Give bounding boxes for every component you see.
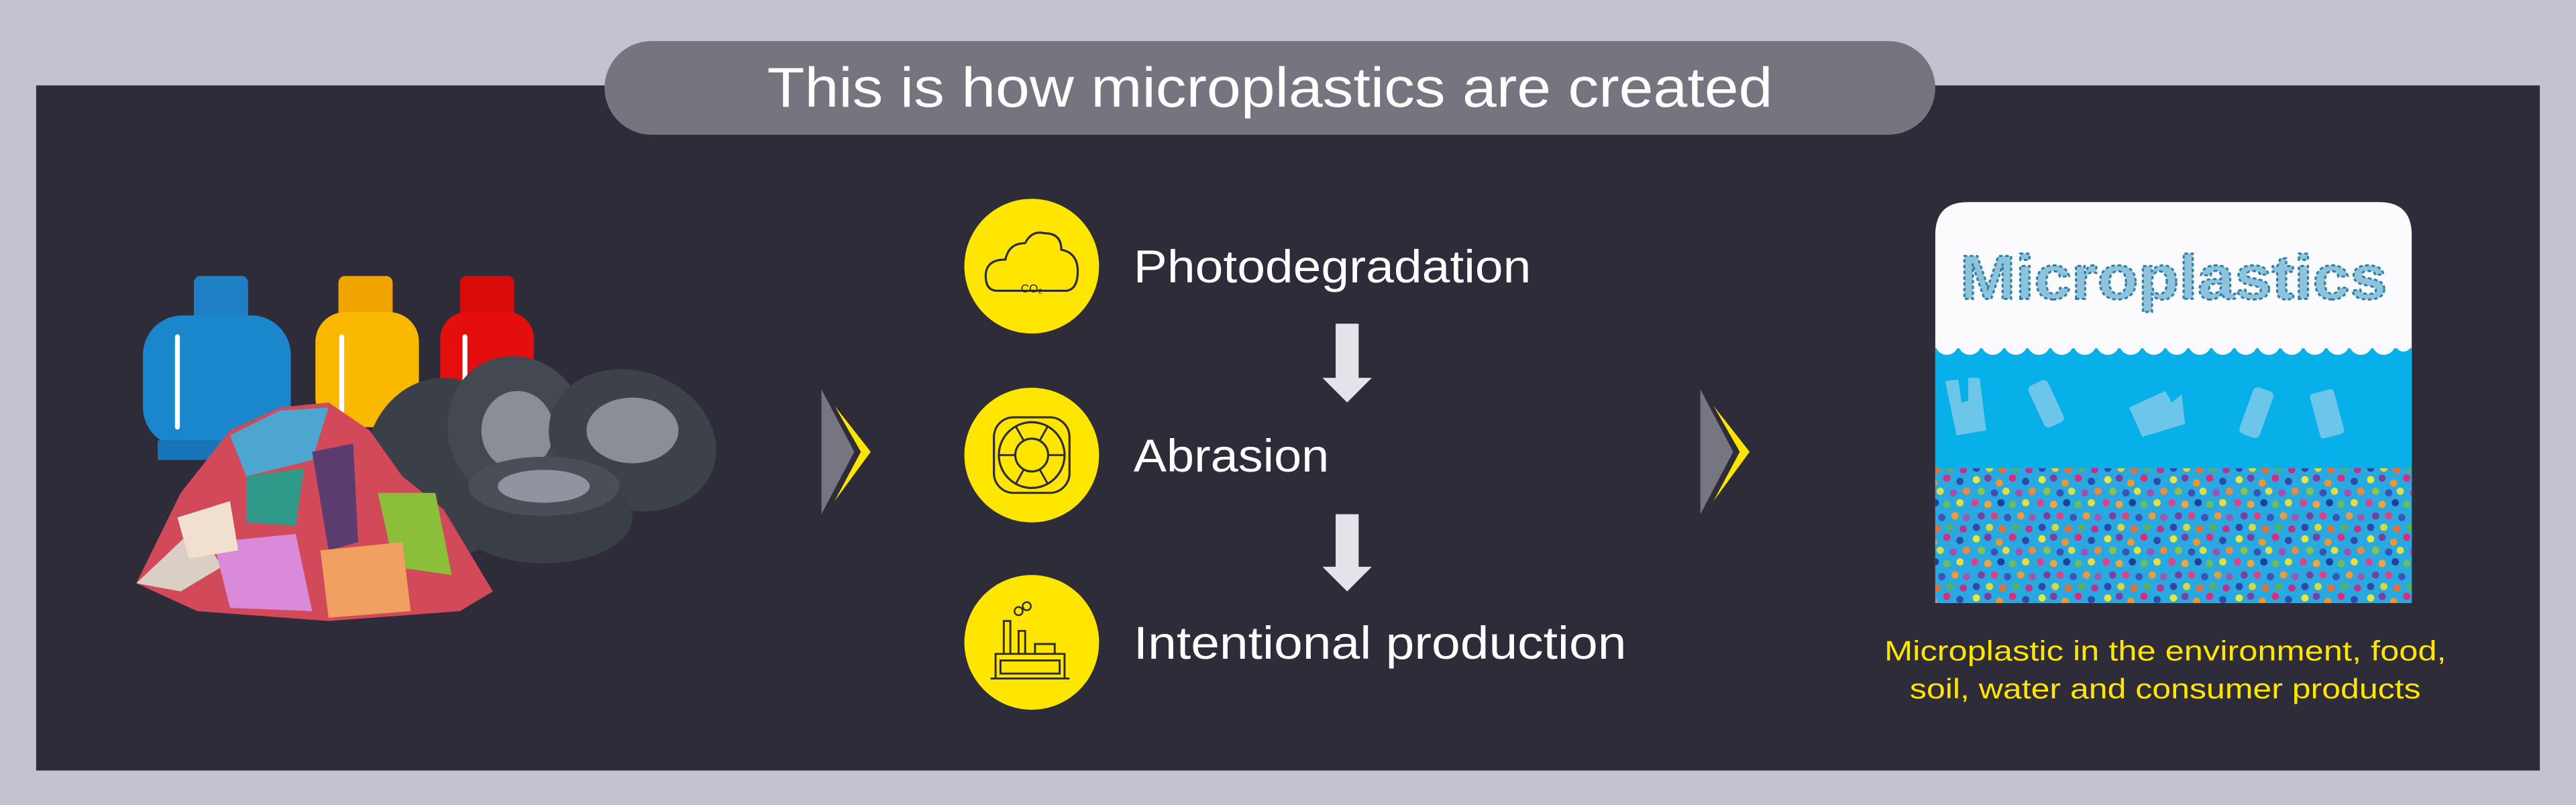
text: Microplastics heading: Microplastics	[1960, 243, 2387, 313]
caption: Microplastic in the environment, food,	[1884, 635, 2447, 666]
step: intentional production	[965, 575, 1626, 710]
icon: floating plastic items	[1945, 378, 2345, 439]
title: This is how microplastics are created	[767, 56, 1772, 119]
icon: factory	[965, 575, 1099, 710]
label: intentional production: Intentional production	[1134, 617, 1626, 669]
illustration: sources (gas cylinders, clothes, tires)	[136, 276, 737, 621]
title	[604, 41, 1935, 135]
arrow: down 1	[1322, 323, 1372, 402]
step: abrasion	[965, 388, 1329, 523]
icon: tires	[365, 333, 737, 564]
label: photodegradation: Photodegradation	[1134, 241, 1531, 292]
icon: tire ring	[965, 388, 1099, 523]
label: abrasion: Abrasion	[1134, 430, 1329, 482]
arrow: chevron left	[821, 389, 871, 515]
icon: blue gas cylinder	[143, 276, 290, 460]
image: microplastics card	[1935, 202, 2412, 603]
icon: yellow gas cylinder	[315, 276, 419, 427]
icon: pile of clothes	[136, 402, 493, 621]
caption: soil, water and consumer products	[1910, 673, 2421, 704]
step: photodegradation	[965, 199, 1531, 333]
caption	[1884, 635, 2447, 704]
arrow: chevron right	[1701, 389, 1750, 515]
icon: cloud CO2: CO₂	[1021, 282, 1042, 295]
icon: red gas cylinder	[440, 276, 534, 419]
icon: cloud CO2	[965, 199, 1099, 333]
decorative wave	[1935, 332, 2412, 355]
arrow: down 2	[1322, 515, 1372, 592]
